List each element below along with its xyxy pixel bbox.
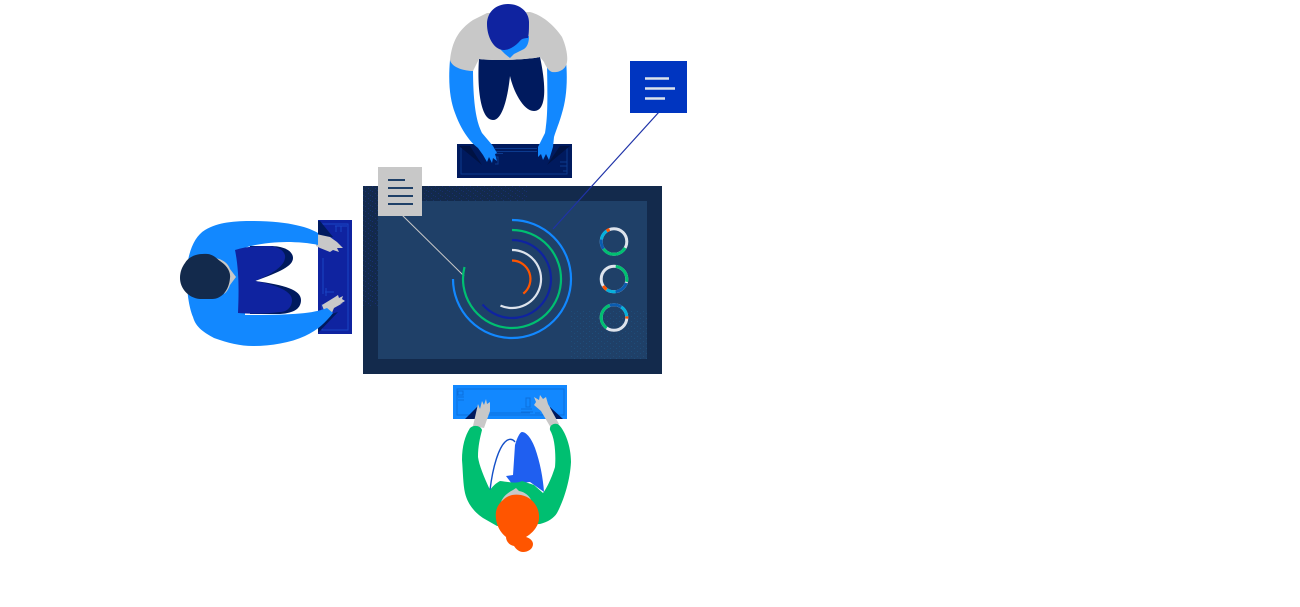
keyboard: navy <box>457 144 572 178</box>
neck <box>500 488 532 506</box>
radial arc chart <box>453 220 571 338</box>
keyboard: indigo <box>318 220 352 334</box>
legs shadow <box>250 246 301 314</box>
note: gray document <box>378 167 422 216</box>
back and legs <box>506 432 544 492</box>
hands <box>473 395 559 428</box>
person: left, at indigo keyboard <box>180 220 352 346</box>
hair <box>496 495 539 552</box>
donut chart 2 <box>601 266 627 292</box>
collar <box>215 258 236 294</box>
legs <box>235 246 292 314</box>
table with dashboard <box>363 186 662 374</box>
connector line: blue note <box>553 112 659 229</box>
neck <box>498 36 529 58</box>
keyboard: bright blue <box>453 385 567 419</box>
legs <box>478 57 544 120</box>
head <box>180 254 230 299</box>
person: bottom, at bright blue keyboard <box>453 385 571 552</box>
donut chart 1 <box>601 229 627 254</box>
chair line <box>490 439 515 490</box>
hands <box>316 234 345 316</box>
note: blue document <box>630 61 687 113</box>
person: top, at navy keyboard <box>449 4 572 178</box>
shirt <box>450 12 567 72</box>
connector line: gray note <box>402 215 464 276</box>
head <box>487 4 529 50</box>
arms <box>449 60 567 163</box>
donut chart 3 <box>601 305 627 330</box>
body <box>462 424 571 526</box>
body <box>187 221 333 346</box>
